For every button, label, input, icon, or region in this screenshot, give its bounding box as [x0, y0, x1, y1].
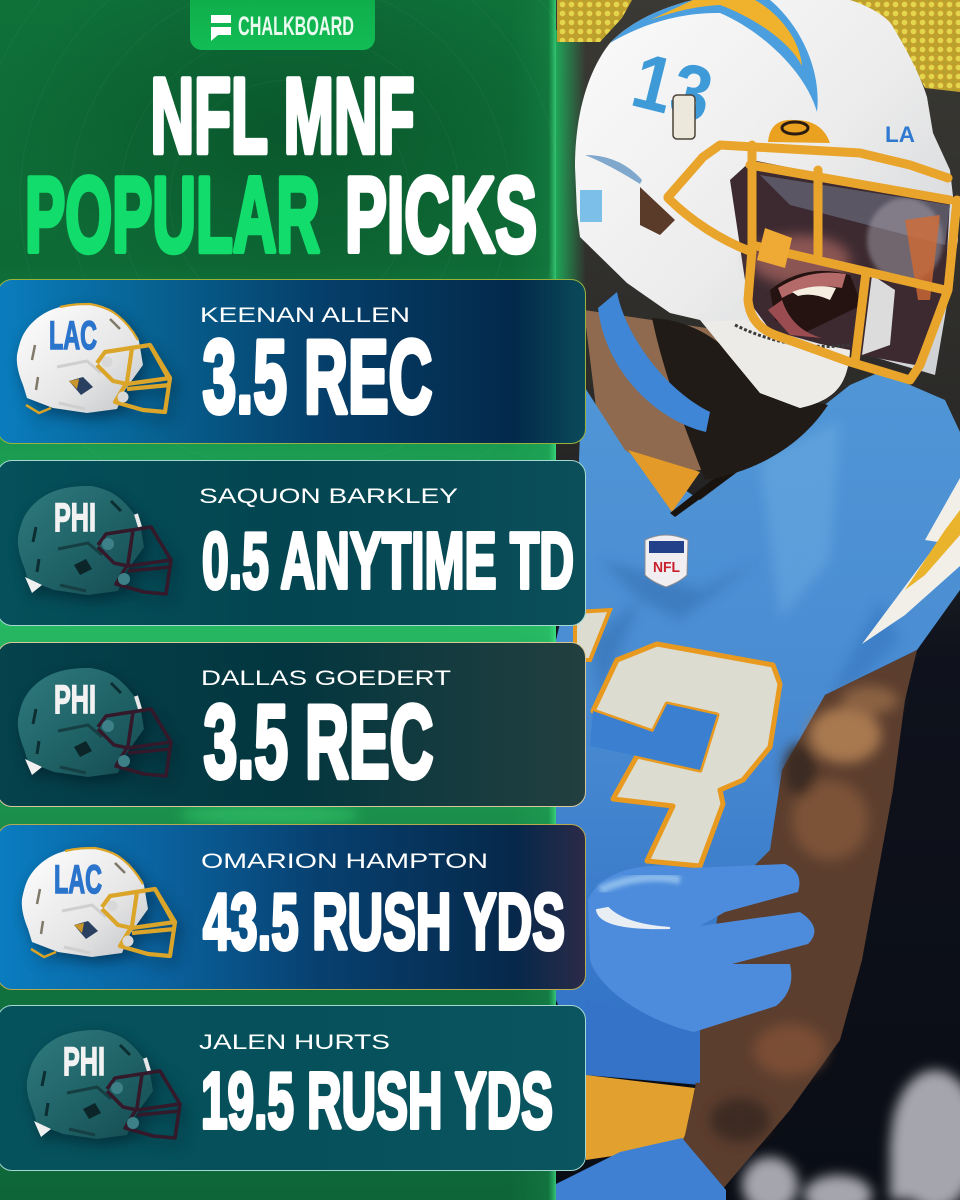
- face behind mask: [730, 160, 950, 365]
- chin guard: [703, 320, 850, 408]
- card: Saquon Barkley: [0, 460, 586, 626]
- helmet: PHI: PHI: [54, 678, 96, 722]
- helmet clip: [673, 95, 695, 139]
- player name: KEENAN ALLEN: [200, 304, 410, 327]
- helmet: PHI: [18, 486, 171, 595]
- helmet: LAC: [22, 848, 175, 957]
- beard: [652, 318, 828, 480]
- helmet: PHI: [27, 1030, 180, 1139]
- pick line: 43.5 RUSH YDS: [203, 877, 565, 966]
- player name: JALEN HURTS: [199, 1031, 390, 1054]
- neck band: [598, 292, 710, 432]
- lower jersey: [586, 1000, 700, 1083]
- player name: SAQUON BARKLEY: [199, 485, 458, 508]
- logo: Chalkboard tab: [190, 0, 375, 50]
- card: Jalen Hurts: [0, 1005, 586, 1171]
- helmet: LAC: LAC: [54, 858, 102, 902]
- logo icon: [211, 15, 231, 41]
- blurred spectators: [742, 1070, 960, 1200]
- glove: [588, 864, 814, 1032]
- tattooed arm: [680, 650, 917, 1200]
- partial digit: [575, 610, 610, 660]
- helmet: LAC: [17, 304, 170, 413]
- sleeve bolt: [862, 478, 960, 644]
- pick line: 0.5 ANYTIME TD: [202, 516, 574, 605]
- helmet shell: [575, 0, 958, 408]
- photo backdrop: [556, 0, 960, 1200]
- card: Dallas Goedert: [0, 642, 586, 807]
- player name: OMARION HAMPTON: [201, 850, 488, 873]
- lower glove: [556, 1138, 726, 1200]
- jersey number: [593, 644, 780, 866]
- player name: DALLAS GOEDERT: [201, 667, 451, 690]
- card: Omarion Hampton: [0, 824, 586, 990]
- helmet: PHI: [18, 668, 171, 777]
- ear hole: [640, 187, 675, 235]
- facemask clip: [757, 228, 792, 268]
- card: Keenan Allen: [0, 279, 586, 444]
- title: [25, 56, 537, 270]
- pick line: 19.5 RUSH YDS: [201, 1056, 553, 1145]
- collar: [628, 450, 700, 512]
- helmet LA mark: LA: [885, 122, 915, 147]
- neck: [584, 310, 760, 480]
- helmet: PHI: PHI: [63, 1040, 105, 1084]
- NFL shield: NFL: [653, 559, 680, 576]
- helmet: PHI: PHI: [54, 496, 96, 540]
- crowd: stadium left: [557, 0, 632, 42]
- NFL shield: [645, 535, 688, 587]
- helmet bolt: [610, 0, 818, 112]
- pants: [586, 1075, 695, 1160]
- helmet: LAC: LAC: [49, 314, 97, 358]
- pick line: 3.5 REC: [202, 320, 432, 436]
- pick line: 3.5 REC: [204, 684, 434, 800]
- facemask: [668, 145, 957, 380]
- crowd: stadium right: [838, 0, 960, 92]
- helmet number: 13: [624, 35, 721, 140]
- jersey: [556, 372, 960, 1085]
